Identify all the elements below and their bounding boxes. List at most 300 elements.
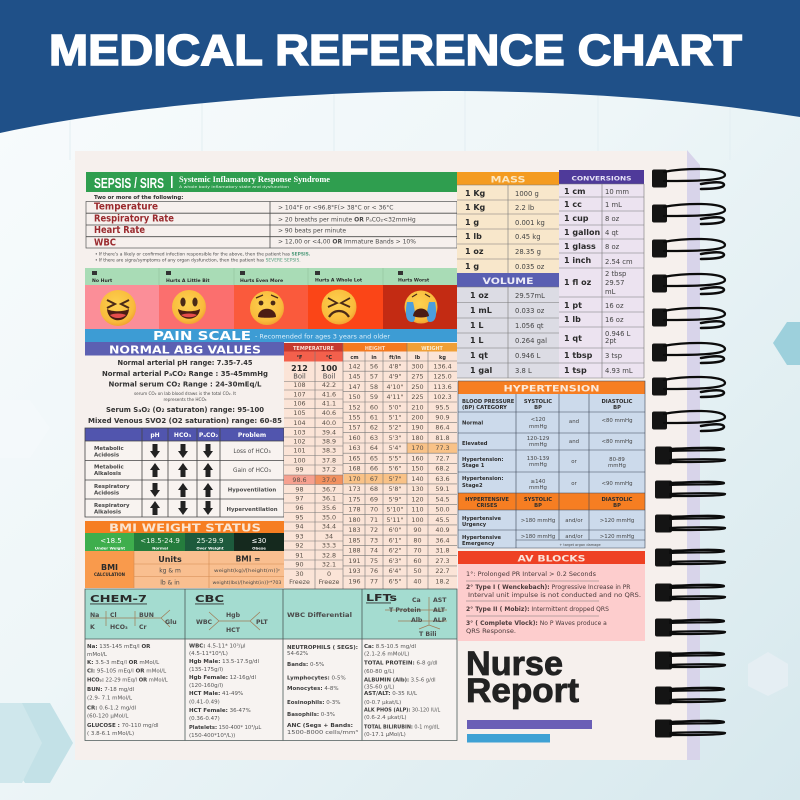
ABG acid-base table: Alkalosis: [94, 471, 121, 477]
panel: mass table: 1000 g: [515, 190, 539, 198]
icon: worried face: [250, 291, 284, 325]
chem-7 values: ( 3.8-6.1 mMol/L): [87, 731, 134, 737]
WBC differential values: Monocytes: 4-8%: [287, 686, 339, 692]
panel: conversions table: 1 cc: [564, 200, 582, 209]
panel: BMI weight status: ≤30: [252, 537, 266, 545]
panel: mass table: 0.035 oz: [515, 263, 545, 271]
panel: mass table: 1 Kg: [465, 189, 486, 198]
panel: AV blocks: Interval unit impulse is not conducted and no QRS.: [468, 592, 641, 599]
temperature values: 99: [295, 466, 304, 474]
panel: conversions table: 4 qt: [605, 229, 619, 237]
panel: BMI weight status: Obese: [252, 546, 266, 550]
panel: hypertension table: Urgency: [462, 522, 487, 528]
panel: temperature height weight chart: °F: [297, 355, 302, 361]
temperature values: 33.3: [322, 542, 336, 550]
panel: normal ABG values: Normal serum CO₂ Range : 24-30mEq/L: [108, 380, 262, 388]
panel: conversions table: 3 tsp: [605, 352, 622, 360]
panel: hypertension table: Hypertension:: [462, 476, 503, 482]
panel: AV blocks: 1°: Prolonged PR Interval > 0.2 Seconds: [466, 570, 596, 578]
temperature values: 35.6: [322, 504, 336, 512]
temperature values: 30: [295, 570, 304, 578]
LFTs diagram: ALT: [433, 607, 446, 614]
panel: hypertension table: Hypertensive: [462, 516, 501, 522]
chem-7 values: CR: 0.6-1.2 mg/dl: [87, 706, 137, 712]
title: MEDICAL REFERENCE CHART: [49, 26, 742, 75]
temperature values: Freeze: [289, 578, 310, 586]
weight values: 77.3: [435, 444, 450, 452]
height values: 5'10": [387, 506, 404, 514]
height values: 5'8": [389, 485, 401, 493]
temperature values: 94: [295, 522, 304, 530]
panel: normal ABG values: represents the HCO₃: [164, 397, 207, 402]
panel: hypertension table: and/or: [565, 518, 584, 524]
arrows: metabolic alkalosis: [150, 463, 213, 477]
panel: volume table: 0.946 L: [515, 352, 541, 360]
CBC values: (150-400*10⁹/L)): [189, 732, 235, 739]
panel: mass table: 28.35 g: [515, 248, 541, 256]
sepsis criteria table: WBC: [94, 238, 116, 248]
LFTs diagram: ALP: [433, 617, 447, 624]
panel: BMI weight status: weight(kg)/[height(m)]²: [214, 568, 280, 573]
ABG acid-base table: Respiratory: [94, 503, 130, 509]
weight values: 80: [413, 536, 422, 544]
height values: 6'4": [389, 567, 401, 575]
height values: 69: [370, 495, 378, 503]
LFT values: (2.1-2.6 mMol/L): [364, 652, 409, 658]
panel: conversions table: 2.54 cm: [605, 258, 633, 266]
height values: 185: [348, 536, 361, 544]
weight values: 190: [411, 424, 424, 432]
temperature values: 36.7: [322, 486, 336, 494]
weight values: 136.4: [433, 362, 452, 370]
panel: hypertension table: mmHg: [529, 485, 547, 491]
panel: conversions table: 4.93 mL: [605, 367, 633, 375]
temperature values: 98: [295, 486, 304, 494]
panel: temperature height weight chart: HEIGHT: [365, 346, 386, 352]
panel: temperature height weight chart: in: [371, 355, 377, 361]
WBC differential values: Bands: 0-5%: [287, 662, 324, 668]
panel: hypertension table: HYPERTENSIVE: [465, 497, 509, 503]
panel: lab values: [85, 589, 457, 740]
temperature values: 0: [327, 570, 331, 578]
temperature values: 41.6: [322, 390, 336, 398]
panel: sepsis / SIRS: Systemic Inflamatory Response Syndrome: [179, 175, 330, 184]
sepsis criteria table: Heart Rate: [94, 225, 145, 236]
temperature values: 32.8: [322, 552, 336, 560]
weight values: 81.8: [435, 434, 450, 442]
panel: hypertension table: mmHg: [529, 442, 547, 448]
height values: 76: [370, 567, 378, 575]
conversions heading: CONVERSIONS: [572, 174, 632, 182]
panel: hypertension table: or: [571, 481, 578, 487]
panel: hypertension table: mmHg: [608, 463, 626, 469]
LFT values: (0-0.7 μkat/L): [364, 700, 401, 706]
ABG acid-base table: PₐCO₂: [199, 432, 219, 439]
panel: BMI weight status: kg & m: [159, 568, 181, 574]
height values: 152: [348, 403, 361, 411]
height values: 191: [348, 557, 361, 565]
temperature values: 91: [295, 552, 304, 560]
panel: hypertension table: and: [569, 419, 579, 425]
CBC values: (0.36-0.47): [189, 716, 220, 722]
panel: conversions table: 1 tsp: [564, 366, 587, 375]
panel: hypertension table: >120 mmHg: [600, 534, 634, 540]
panel: hypertension table: DIASTOLIC: [602, 497, 633, 503]
temperature values: 102: [293, 438, 306, 446]
mass heading: MASS: [490, 176, 526, 186]
temperature values: 90: [295, 560, 304, 568]
icon: smiling face: [172, 290, 206, 324]
panel: sepsis / SIRS: • If there's a likely or confirmed infection responsible for the above, then the patient has SEPSIS.: [95, 252, 311, 258]
temperature values: 96: [295, 504, 304, 512]
LFT values: (0-17.1 μMol/L): [364, 732, 406, 738]
CBC values: (0.41-0.49): [189, 700, 220, 706]
panel: conversions table: 1 gallon: [564, 228, 600, 237]
temperature values: 100: [293, 456, 306, 464]
weight values: 50: [413, 567, 422, 575]
height values: 5'6": [389, 465, 401, 473]
panel: hypertension table: ≥140: [531, 479, 546, 485]
panel: sepsis / SIRS: [86, 172, 457, 264]
icon: pained face: [322, 290, 356, 324]
weight values: 72.7: [435, 454, 450, 462]
height values: 6'2": [389, 547, 401, 555]
panel: pain scale: - Recomended for ages 3 years and older: [255, 334, 391, 340]
temperature values: 105: [293, 409, 306, 417]
panel: AV blocks: 3° ( Complete Vlock): No P Waves produce a: [466, 620, 607, 627]
panel: BMI weight status: Under Weight: [95, 546, 125, 550]
weight values: 90: [413, 526, 422, 534]
chem-7 values: HCO₃: 22-29 mEq/l OR mMol/L: [87, 678, 168, 684]
panel: hypertension table: Normal: [462, 420, 483, 426]
chem-7 diagram: K: [90, 624, 95, 631]
weight values: 140: [411, 475, 424, 483]
height values: 5'3": [389, 434, 401, 442]
panel: hypertension table: CRISES: [477, 503, 498, 509]
panel: AV blocks: 2° Type I ( Wenckebach): Progressive Increase in PR: [466, 584, 630, 591]
height values: 5'4": [389, 444, 401, 452]
temperature values: 92: [295, 542, 304, 550]
ABG acid-base table: Gain of HCO₃: [233, 468, 272, 474]
height values: 61: [370, 414, 378, 422]
arrows: respiratory acidosis: [150, 483, 213, 497]
height values: 4'8": [389, 362, 401, 370]
temperature values: 42.2: [322, 381, 336, 389]
height values: 150: [348, 393, 361, 401]
chem-7 diagram: CHEM-7: [90, 594, 147, 605]
height values: 5'2": [389, 424, 401, 432]
WBC differential values: Lymphocytes: 0-5%: [287, 676, 346, 682]
height values: 75: [370, 557, 378, 565]
sepsis criteria table: > 12,00 or <4,00 OR Immature Bands > 10%: [278, 238, 416, 246]
ABG acid-base table: Alkalosis: [94, 510, 121, 516]
temperature values: 37.0: [322, 476, 336, 484]
panel: sepsis / SIRS: • If there are signs/symptoms of any organ dysfunction, then the patient has SEVERE SEPSIS.: [95, 258, 301, 264]
WBC differential values: NEUTROPHILS ( SEGS):: [287, 645, 358, 651]
height values: 173: [348, 485, 361, 493]
panel: pain scale: Hurts Even More: [240, 278, 283, 284]
height values: 168: [348, 465, 361, 473]
weight values: 36.4: [435, 536, 450, 544]
height values: 6'0": [389, 526, 401, 534]
weight values: 45.5: [435, 516, 450, 524]
height values: 178: [348, 506, 361, 514]
chem-7 values: K: 3.5-3 mEq/l OR mMol/L: [87, 660, 160, 666]
panel: BMI weight status: <18.5: [100, 537, 122, 545]
panel: hypertension table: + target organ damage: [559, 543, 601, 547]
CBC values: HCT Male: 41-49%: [189, 691, 243, 697]
panel: normal ABG values: serum CO₂ on lab blood draws is the total CO₂. It: [134, 391, 236, 396]
panel: volume table: 1 L: [470, 321, 483, 330]
LFTs diagram: Ca: [412, 597, 421, 604]
pain scale heading: PAIN SCALE: [153, 329, 251, 343]
height values: 145: [348, 372, 361, 380]
height values: 66: [370, 465, 378, 473]
height values: 68: [370, 485, 378, 493]
panel: conversions table: 1 mL: [605, 201, 622, 209]
panel: normal ABG values: [85, 342, 284, 517]
weight values: 300: [411, 362, 424, 370]
BMI heading: BMI WEIGHT STATUS: [109, 522, 261, 534]
temperature values: 100: [321, 364, 338, 373]
temperature values: 38.3: [322, 446, 336, 454]
panel: conversions table: [559, 170, 644, 378]
panel: temperature height weight chart: [284, 343, 457, 590]
panel: hypertension table: BP: [534, 503, 542, 509]
temperature values: Boil: [323, 372, 335, 380]
panel: conversions table: 10 mm: [605, 188, 629, 196]
WBC differential values: 54-62%: [287, 651, 308, 657]
height values: 5'9": [389, 495, 401, 503]
height values: 59: [370, 393, 378, 401]
panel: mass table: 1 g: [465, 218, 479, 227]
CBC values: HCT Female: 36-47%: [189, 708, 251, 714]
height values: 71: [370, 516, 378, 524]
ABG acid-base table: Problem: [238, 432, 266, 439]
panel: conversions table: 1 cm: [564, 187, 585, 196]
height values: 74: [370, 547, 378, 555]
panel: hypertension table: <90 mmHg: [601, 481, 633, 487]
weight values: 125.0: [433, 372, 452, 380]
ABG acid-base table: Hyperventilation: [226, 507, 278, 513]
panel: hypertension table: 80-89: [609, 457, 625, 463]
panel: conversions table: 0.946 L: [605, 330, 631, 338]
panel: conversions table: 1 pt: [564, 301, 582, 310]
panel: BMI weight status: 25-29.9: [196, 537, 224, 545]
panel: pain scale: Hurts Worst: [398, 278, 430, 284]
panel: hypertension table: (BP) CATEGORY: [462, 405, 507, 411]
weight values: 27.3: [435, 557, 450, 565]
WBC differential values: [287, 645, 358, 736]
panel: hypertension table: BLOOD PRESSURE: [462, 399, 515, 405]
panel: hypertension table: <80 mmHg: [601, 418, 633, 424]
height values: 175: [348, 495, 361, 503]
chem-7 values: Na: 135-145 mEq/l OR: [87, 644, 151, 650]
chem-7 values: [87, 644, 168, 737]
ABG acid-base table: [85, 428, 284, 517]
CBC values: Platelets: 150-400* 10³/µL: [189, 725, 261, 731]
panel: normal ABG values: Serum SₐO₂ (O₂ saturaton) range: 95-100: [106, 406, 264, 414]
ABG acid-base table: Loss of HCO₃: [233, 449, 271, 455]
panel: volume table: 1.056 qt: [515, 322, 544, 330]
panel: conversions table: mL: [605, 288, 616, 296]
panel: hypertension table: or: [571, 459, 578, 465]
panel: volume table: 0.033 oz: [515, 307, 545, 315]
temperature values: 101: [293, 446, 306, 454]
CBC values: (120-160g/l): [189, 683, 223, 689]
weight values: 86.4: [435, 424, 450, 432]
panel: hypertension table: [458, 381, 645, 548]
panel: normal ABG values: Normal arterial pH range: 7.35-7.45: [118, 359, 253, 367]
height values: 5'5": [389, 454, 401, 462]
panel: temperature height weight chart: °C: [326, 355, 332, 361]
LFT values: ALK PHOS (ALP): 30-120 IU/L: [364, 708, 440, 714]
sepsis criteria table: Respiratory Rate: [94, 214, 174, 224]
panel: conversions table: 8 oz: [605, 243, 620, 251]
icon: laughing face: [100, 290, 136, 326]
accent bars: [467, 720, 592, 742]
height values: 193: [348, 567, 361, 575]
LFT values: (0.6-2.4 μkat/L): [364, 715, 407, 721]
chem-7 values: GLUCOSE : 70-110 mg/dl: [87, 723, 159, 729]
LFTs diagram: LFTs: [366, 593, 397, 604]
panel: pain scale: No Hurt: [92, 278, 113, 284]
panel: pain scale: [85, 268, 457, 343]
height values: [348, 362, 404, 585]
panel: conversions table: 1 cup: [564, 214, 589, 223]
LFTs diagram: T Bili: [419, 631, 436, 638]
panel: conversions table: 1 lb: [564, 315, 581, 324]
WBC differential values: ANC (Segs + Bands:: [287, 723, 353, 729]
LFT values: TOTAL PROTEIN: 6-8 g/dl: [364, 660, 438, 666]
spiral binding: [652, 169, 725, 737]
AV blocks heading: AV BLOCKS: [518, 554, 586, 564]
weight values: 95.5: [435, 403, 450, 411]
LFTs diagram: AST: [433, 597, 447, 604]
panel: hypertension table: >180 mmHg: [521, 534, 555, 540]
ABG acid-base table: Acidosis: [94, 452, 119, 458]
panel: conversions table: 1 glass: [564, 242, 596, 251]
chem-7 diagram: Cr: [139, 624, 148, 631]
temperature values: 39.4: [322, 428, 336, 436]
panel: BMI weight status: weight(lbs)/[height(in)]²*703: [212, 580, 282, 585]
panel: mass table: 1 oz: [465, 247, 484, 256]
temperature values: 108: [293, 381, 306, 389]
temperature values: 35.0: [322, 514, 336, 522]
CBC values: WBC: 4.5-11* 10³/µl: [189, 642, 246, 650]
CBC diagram: CBC: [195, 594, 224, 605]
panel: hypertension table: SYSTOLIC: [524, 399, 552, 405]
chem-7 values: (2.9- 7.1 mMol/L: [87, 696, 133, 702]
temperature values: 107: [293, 390, 306, 398]
temperature values: 97: [295, 494, 304, 502]
arrows: respiratory alkalosis: [150, 501, 213, 515]
ABG heading: NORMAL ABG VALUES: [109, 344, 261, 356]
panel: mass table: 0.001 kg: [515, 219, 545, 227]
weight values: [411, 362, 452, 585]
panel: hypertension table: mmHg: [529, 424, 547, 430]
panel: mass table: 1 Kg: [465, 203, 486, 212]
panel: conversions table: 1 tbsp: [564, 351, 593, 360]
ABG acid-base table: pH: [150, 432, 160, 439]
temperature values: 38.9: [322, 438, 336, 446]
weight values: 18.2: [435, 577, 450, 585]
panel: BMI weight status: Normal: [152, 546, 168, 550]
temperature values: 36.1: [322, 494, 336, 502]
panel: pain scale: Hurts A Little Bit: [166, 278, 210, 284]
panel: BMI weight status: lb & in: [160, 580, 180, 586]
volume heading: VOLUME: [482, 277, 534, 287]
height values: 64: [370, 444, 378, 452]
height values: 4'9": [389, 372, 401, 380]
weight values: 275: [411, 372, 424, 380]
CBC diagram: Hgb: [226, 612, 241, 619]
WBC differential heading: WBC Differential: [287, 612, 352, 619]
panel: pain scale: Hurts A Whole Lot: [315, 278, 363, 284]
LFT values: ALBUMIN (Alb): 3.5-6 g/dl: [364, 678, 436, 684]
panel: volume table: 29.57mL: [515, 292, 545, 300]
weight values: 225: [411, 393, 424, 401]
weight values: 102.3: [433, 393, 452, 401]
CBC values: (4.5-11*10⁹/L): [189, 650, 228, 657]
panel: hypertension table: SYSTOLIC: [524, 497, 552, 503]
LFT values: (35-60 g/L): [364, 684, 394, 690]
panel: mass table: 1 lb: [465, 232, 482, 241]
CBC values: Hgb Female: 12-16g/dl: [189, 675, 256, 681]
ABG acid-base table: Hypoventilation: [228, 488, 276, 494]
ABG acid-base table: HCO₃: [174, 432, 191, 439]
panel: volume table: 1 oz: [470, 291, 489, 300]
CBC values: [189, 642, 261, 739]
height values: 4'10": [387, 383, 404, 391]
panel: AV blocks: [458, 551, 645, 641]
panel: mass table: 1 g: [465, 262, 479, 271]
panel: BMI weight status: BMI: [101, 563, 118, 572]
weight values: 90.9: [435, 414, 450, 422]
panel: AV blocks: QRS Response.: [466, 628, 516, 635]
panel: conversions table: 2pt: [605, 337, 617, 345]
panel: BMI weight status: Units: [158, 555, 182, 564]
temperature values: 106: [293, 400, 306, 408]
ABG acid-base table: Acidosis: [94, 490, 119, 496]
height values: 4'11": [387, 393, 404, 401]
panel: mass table: 0.45 kg: [515, 233, 541, 241]
panel: normal ABG values: Normal arterial PₐCO₂ Range : 35-45mmHg: [102, 370, 268, 378]
panel: conversions table: 8 oz: [605, 215, 620, 223]
temperature values: Boil: [293, 372, 306, 380]
panel: conversions table: 1 qt: [564, 334, 582, 343]
temperature values: 95: [295, 514, 304, 522]
panel: conversions table: 1 inch: [564, 256, 592, 265]
height values: 6'1": [389, 536, 401, 544]
LFTs diagram: [366, 593, 447, 638]
weight values: 50.0: [435, 506, 450, 514]
panel: conversions table: 29.57: [605, 279, 624, 287]
weight values: 22.7: [435, 567, 450, 575]
height values: 58: [370, 383, 378, 391]
panel: hypertension table: >180 mmHg: [521, 518, 555, 524]
panel: temperature height weight chart: lb: [415, 355, 421, 361]
Nurse Report title: [466, 645, 579, 710]
height values: 155: [348, 414, 361, 422]
ABG acid-base table: Metabolic: [94, 446, 124, 452]
height values: 5'1": [389, 414, 401, 422]
panel: volume table: 1 mL: [470, 306, 492, 315]
panel: temperature height weight chart: WEIGHT: [421, 346, 444, 352]
temperature values: [289, 364, 339, 586]
arrows: metabolic acidosis: [150, 444, 213, 458]
height values: 56: [370, 362, 378, 370]
